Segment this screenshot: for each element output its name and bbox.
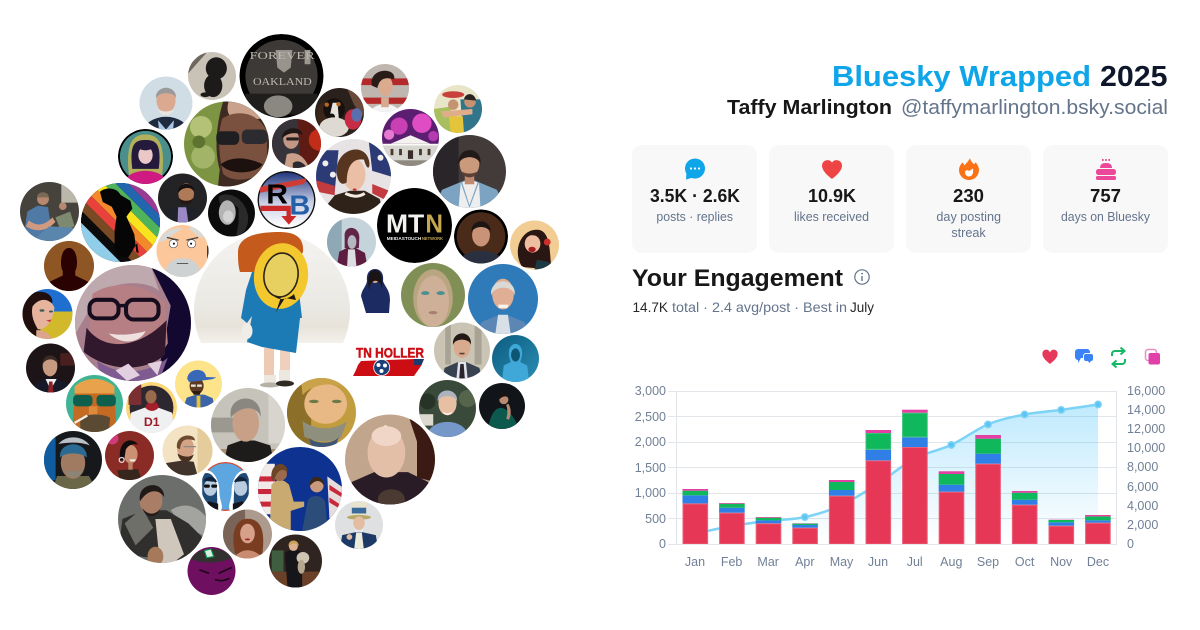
avatar: grey-haired man indoors xyxy=(211,388,285,464)
bar: May xyxy=(829,480,854,544)
chart legend xyxy=(1042,348,1160,368)
avatar: blue hoodie xyxy=(492,335,539,382)
right axis labels: 6,000 xyxy=(1127,480,1158,494)
month labels: Dec xyxy=(1087,555,1109,569)
avatar: two men illustration xyxy=(201,462,250,511)
avatar: MeidasTouch Network: N xyxy=(425,210,443,238)
month labels: Apr xyxy=(795,555,815,569)
bar: Apr xyxy=(792,523,818,544)
month labels: Sep xyxy=(977,555,999,569)
stat label: days on Bluesky xyxy=(1061,210,1151,224)
avatar: laughing woman xyxy=(510,220,559,270)
avatar: blonde woman with scarf xyxy=(287,378,356,447)
avatar: White House fireworks xyxy=(382,109,439,167)
avatar: man in blue blazer xyxy=(433,135,506,208)
cumulative line xyxy=(695,404,1098,534)
icon: cake xyxy=(1096,159,1116,180)
title: 2025 xyxy=(1100,61,1168,93)
bar: Aug xyxy=(939,471,964,544)
icon: flame xyxy=(959,158,979,180)
bar: Jul xyxy=(902,410,928,544)
avatar: woman holding a dog xyxy=(269,534,322,588)
left axis labels: 0 xyxy=(659,537,666,551)
title: Bluesky Wrapped xyxy=(832,61,1091,93)
right axis labels: 8,000 xyxy=(1127,460,1158,474)
avatar: couple in costume xyxy=(434,85,482,133)
avatar: man with flag xyxy=(361,64,409,112)
icon: info xyxy=(855,270,869,284)
avatar: green shades portrait xyxy=(66,375,123,432)
doll hat xyxy=(250,240,312,312)
avatar: blurred blonde woman xyxy=(401,263,465,327)
right axis labels: 4,000 xyxy=(1127,499,1158,513)
doll hand xyxy=(242,323,252,339)
bar: Jan xyxy=(682,489,708,544)
stat label second line: streak xyxy=(951,226,986,240)
avatar: bald man xyxy=(345,414,435,509)
legend icon: quotes xyxy=(1146,350,1160,364)
month labels: Jan xyxy=(685,555,705,569)
avatar: MeidasTouch Network xyxy=(377,188,452,263)
avatar: monochrome purple woman xyxy=(327,218,376,266)
right axis labels: 12,000 xyxy=(1127,422,1165,436)
doll hair xyxy=(238,232,303,272)
avatar: Uncle Sam xyxy=(335,501,383,549)
avatar: D1 jersey: D1 xyxy=(144,415,160,429)
stat value: 230 xyxy=(953,186,984,206)
avatar: Forever Oakland xyxy=(240,34,324,118)
user name and handle: Taffy Marlington xyxy=(727,97,892,119)
heading: Your Engagement: Your Engagement xyxy=(632,265,843,292)
avatar: RB logo: B xyxy=(289,190,310,221)
avatar: man on brown background xyxy=(454,210,508,264)
avatar: cavalier spaniel xyxy=(315,88,364,137)
right axis labels xyxy=(1127,384,1165,551)
month labels: Nov xyxy=(1050,555,1073,569)
user name and handle: @taffymarlington.bsky.social xyxy=(901,97,1168,119)
right axis labels: 14,000 xyxy=(1127,403,1165,417)
avatar: cartoon old man xyxy=(156,225,208,277)
right axis labels: 16,000 xyxy=(1127,384,1165,398)
logo: TN Holler xyxy=(353,344,424,376)
avatar: man with glasses and tie xyxy=(434,322,490,378)
avatar: muscular man in cockpit xyxy=(20,182,79,241)
month labels: Oct xyxy=(1015,555,1035,569)
bar: Mar xyxy=(756,517,781,544)
stat value: 3.5K · 2.6K xyxy=(650,186,740,206)
avatar: Forever Oakland: OAKLAND xyxy=(253,76,312,88)
left axis labels: 2,000 xyxy=(635,435,666,449)
chart: monthly engagement xyxy=(635,384,1165,569)
left axis labels: 1,000 xyxy=(635,486,666,500)
avatar: George Takei xyxy=(419,380,476,437)
bar: Sep xyxy=(975,435,1001,544)
doll legs and shoes xyxy=(260,348,294,388)
bar: Nov xyxy=(1048,520,1074,544)
legend icon: likes xyxy=(1042,350,1058,364)
avatar: Pride rainbow silhouette xyxy=(31,133,210,312)
avatar: D1 jersey xyxy=(126,382,177,433)
month labels: Aug xyxy=(940,555,962,569)
stat label: posts · replies xyxy=(656,210,733,224)
avatar: man in suit xyxy=(26,344,75,392)
engagement summary: 14.7K xyxy=(632,299,669,315)
avatar: man in helmet and goggles xyxy=(44,431,102,489)
avatar: purple-haired illustration xyxy=(118,129,173,184)
panel: days on Bluesky xyxy=(1043,145,1168,253)
bar: Jun xyxy=(866,430,891,544)
month labels: Mar xyxy=(757,555,779,569)
panel: likes received xyxy=(769,145,894,253)
left axis labels: 1,500 xyxy=(635,461,666,475)
avatar: smiling man with glasses, big xyxy=(75,265,191,381)
month labels: Jun xyxy=(868,555,888,569)
avatar: RB logo: R xyxy=(266,178,288,209)
avatar: Kamala Harris handshake xyxy=(258,447,342,531)
left axis labels: 500 xyxy=(645,512,666,526)
avatar: MeidasTouch Network: MT xyxy=(386,210,425,238)
bar: Dec xyxy=(1085,515,1111,544)
avatar: smiling man on blue xyxy=(468,264,538,334)
panel: posts and replies xyxy=(632,145,757,253)
logo: TN Holler: TN HOLLER xyxy=(356,344,424,360)
avatar: woman in green dress xyxy=(479,383,525,429)
month labels xyxy=(685,555,1109,569)
stat value: 10.9K xyxy=(808,186,856,206)
avatar: smiling woman on red xyxy=(105,431,154,480)
month labels: Feb xyxy=(721,555,742,569)
avatar: doll in yellow hat xyxy=(194,232,350,388)
engagement summary: July xyxy=(850,299,874,315)
bar: Oct xyxy=(1012,491,1038,544)
avatar: man in dark jacket xyxy=(118,475,206,566)
right axis labels: 10,000 xyxy=(1127,441,1165,455)
month labels: May xyxy=(830,555,854,569)
engagement summary: total · 2.4 avg/post · Best in xyxy=(672,299,847,315)
avatar: woman with flag xyxy=(316,139,391,214)
legend icon: replies xyxy=(1075,349,1094,364)
month labels: Jul xyxy=(907,555,923,569)
avatar: woman with Ukrainian flag xyxy=(22,289,72,339)
grid lines xyxy=(668,391,1117,544)
avatar: Forever Oakland: FOREVER xyxy=(250,50,316,62)
stat label: likes received xyxy=(794,210,869,224)
avatar: black and white woman xyxy=(208,190,255,236)
avatar cluster xyxy=(20,34,559,595)
icon: heart xyxy=(822,160,842,179)
left axis labels: 2,500 xyxy=(635,410,666,424)
right axis labels: 2,000 xyxy=(1127,518,1158,532)
stacked bars xyxy=(682,410,1111,544)
avatar: sunglasses man xyxy=(184,102,269,186)
doll coat xyxy=(241,272,302,353)
avatar: woman with glasses red light xyxy=(272,119,321,168)
avatar: black dog xyxy=(188,52,236,100)
avatar: smiling man in suit xyxy=(158,174,207,222)
line points xyxy=(802,401,1101,520)
avatar: silhouette xyxy=(44,241,94,291)
avatar: grey-haired man xyxy=(140,76,192,130)
stat label: day posting xyxy=(936,210,1001,224)
avatar: RB logo xyxy=(258,171,316,229)
avatar: woman with red hair xyxy=(223,510,272,558)
bar: Feb xyxy=(719,503,745,544)
avatar: purple cartoon with green cap xyxy=(188,547,236,595)
left axis labels: 3,000 xyxy=(635,384,666,398)
left axis labels xyxy=(635,384,666,551)
icon: chat bubble xyxy=(685,158,705,180)
avatar: MeidasTouch Network: MEIDASTOUCH xyxy=(387,236,422,242)
stat value: 757 xyxy=(1090,186,1121,206)
panel: day posting streak xyxy=(906,145,1031,253)
avatar: cartoon man with blue cap xyxy=(175,360,222,408)
right axis labels: 0 xyxy=(1127,537,1134,551)
avatar: bearded man with glasses xyxy=(162,426,212,476)
legend icon: reposts xyxy=(1112,348,1125,368)
cumulative area xyxy=(695,404,1098,544)
avatar: cut-out standing woman xyxy=(361,269,390,313)
user name and handle xyxy=(727,97,1168,119)
avatar: MeidasTouch Network: NETWORK xyxy=(422,236,443,242)
